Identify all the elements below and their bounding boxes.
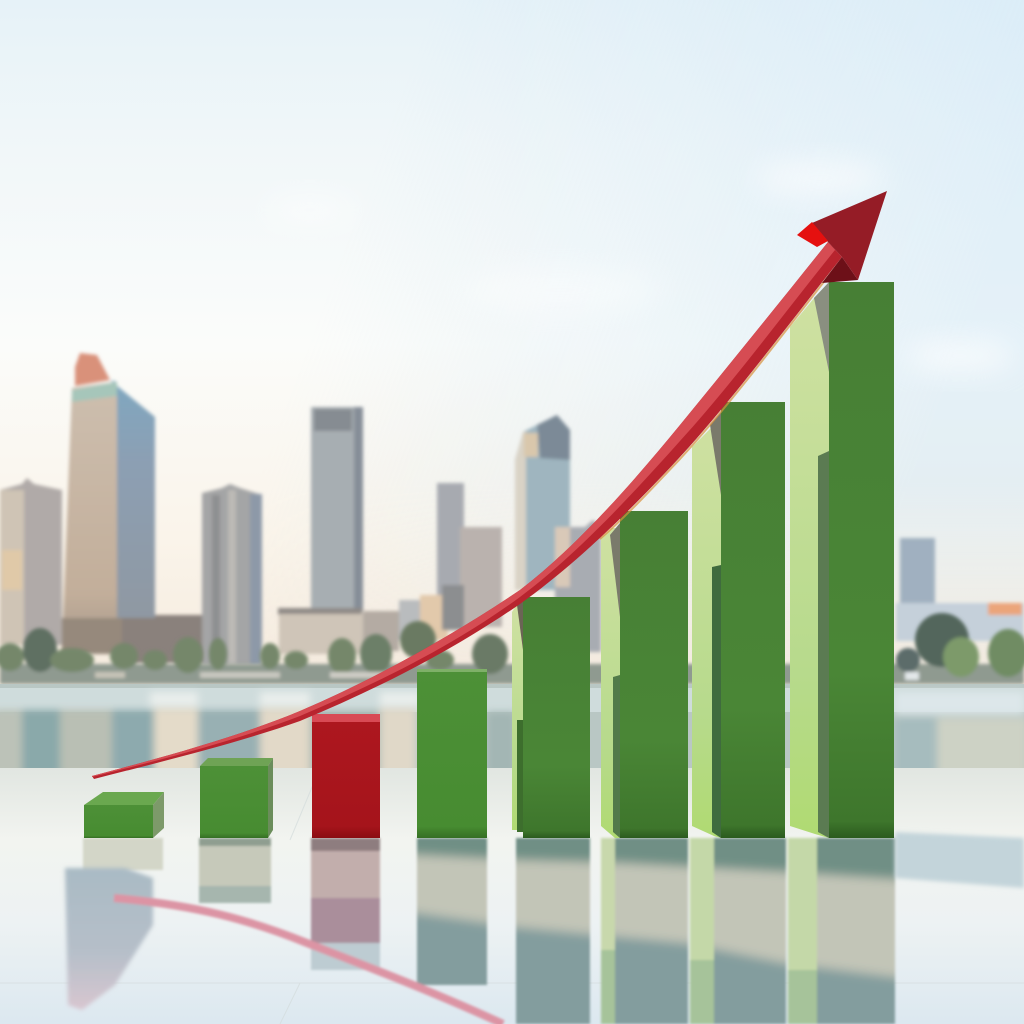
bar 6: green [601, 511, 688, 838]
bar 4: green [417, 669, 487, 838]
tower and buildings: far right [896, 538, 1024, 641]
bar 2: green [200, 758, 273, 838]
arrow shaft upper facet [92, 242, 835, 777]
city skyline [0, 353, 1024, 665]
reflection: bar 3 [311, 838, 380, 970]
reflection: bar 1 [65, 838, 163, 1010]
tower: tall left with orange crown [62, 353, 155, 654]
bar chart [84, 282, 894, 838]
arrow shaft lower facet [92, 242, 842, 779]
floor reflections of bars [65, 820, 1024, 1024]
tower: glass [515, 415, 570, 590]
bar 1: green [84, 792, 164, 838]
reflection: light sides [601, 838, 817, 1024]
tower: centre [311, 407, 363, 611]
sky background [0, 0, 1024, 690]
rising red arrow [92, 191, 887, 779]
arrow underside glow [600, 259, 842, 539]
bar 3: red [312, 714, 380, 838]
bar 5: green [512, 597, 590, 838]
reflection: shadow to right of bars [895, 832, 1024, 888]
tower: behind bars [555, 520, 601, 652]
low brown building [120, 615, 202, 663]
reflection: bar 2 [199, 838, 271, 903]
bar 8: green [790, 282, 894, 838]
bar 7: green [692, 402, 785, 838]
water reflection columns [0, 710, 22, 776]
trees along shoreline [0, 613, 1024, 684]
arrow head [797, 191, 887, 283]
tower: far left [0, 478, 62, 645]
tower: centre left [202, 484, 262, 665]
reflection: arrow [114, 898, 503, 1024]
low buildings centre [278, 600, 421, 654]
water with skyline reflection [0, 684, 1024, 776]
tower: centre right pair [420, 483, 502, 640]
reflection: bars 4 to 8 [415, 836, 896, 1024]
marble floor [0, 768, 1024, 1024]
